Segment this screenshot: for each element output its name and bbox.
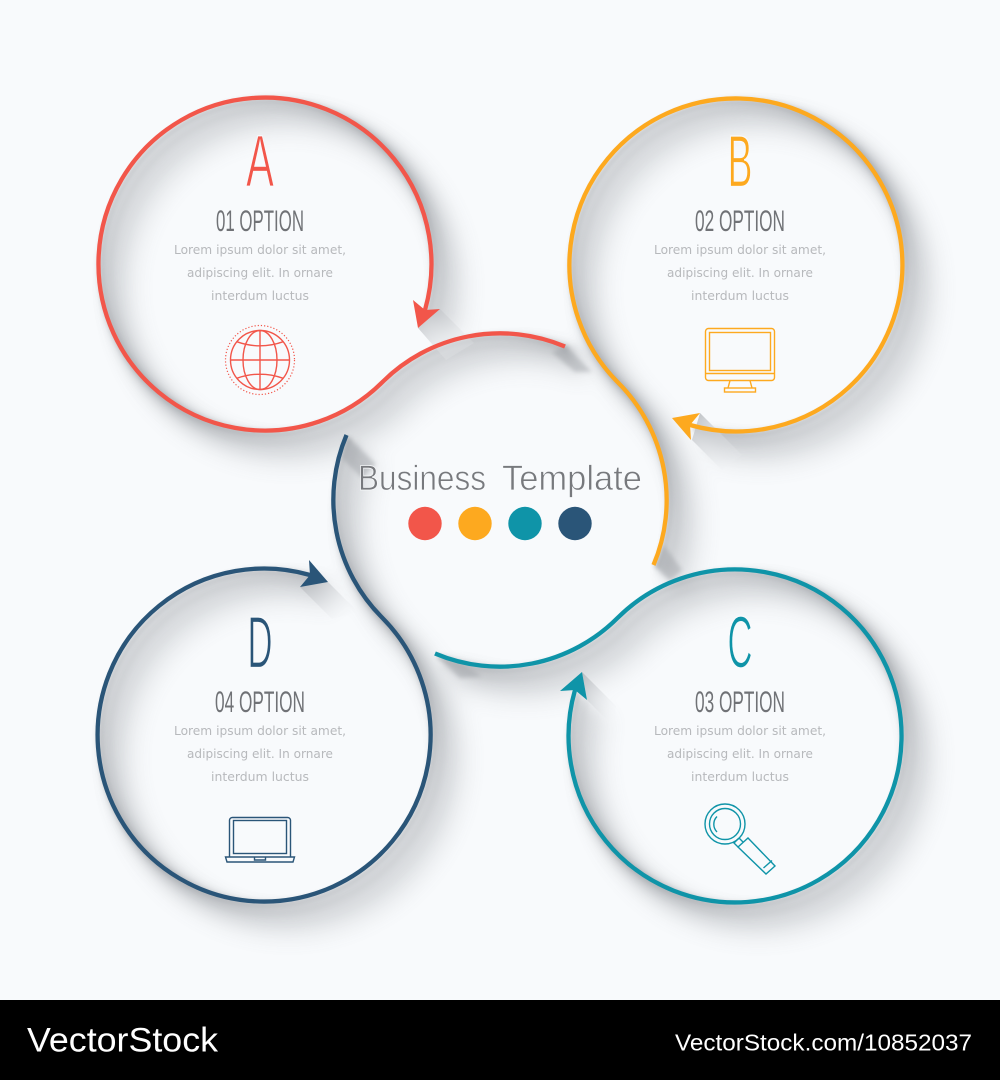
heading 03 OPTION: 03 OPTION	[695, 686, 785, 719]
body text D: adipiscing elit. In ornare	[187, 747, 333, 761]
panel D	[98, 435, 431, 902]
body text C: adipiscing elit. In ornare	[667, 747, 813, 761]
body text A	[174, 243, 346, 303]
ribbon B with arrow	[569, 98, 902, 565]
body text B	[654, 243, 826, 303]
center title: Template	[502, 459, 642, 498]
ribbon C with arrow	[435, 569, 902, 902]
footer bar	[0, 1000, 1000, 1080]
letter A: A	[246, 122, 274, 202]
icon: monitor	[706, 328, 774, 392]
icon: globe	[226, 326, 294, 394]
panel D: D	[248, 602, 272, 684]
heading 02 OPTION: 02 OPTION	[695, 205, 785, 238]
footer logo: VectorStock	[27, 1022, 219, 1060]
panel C: C	[728, 602, 752, 684]
body text D	[174, 724, 346, 784]
body text C: Lorem ipsum dolor sit amet,	[654, 724, 826, 738]
body text B: adipiscing elit. In ornare	[667, 266, 813, 280]
body text B: Lorem ipsum dolor sit amet,	[654, 243, 826, 257]
letter B: B	[728, 122, 752, 202]
long shadows from ribbon ends	[342, 346, 682, 678]
body text C: interdum luctus	[691, 770, 789, 784]
ribbon A with arrow	[98, 98, 565, 431]
long shadows from arrowheads	[300, 309, 742, 728]
center title: Business	[358, 459, 486, 498]
panel A	[98, 98, 565, 431]
body text D: interdum luctus	[211, 770, 309, 784]
center title	[358, 459, 642, 498]
body text A: interdum luctus	[211, 289, 309, 303]
body text A: Lorem ipsum dolor sit amet,	[174, 243, 346, 257]
body text A: adipiscing elit. In ornare	[187, 266, 333, 280]
icon: laptop	[226, 817, 294, 862]
body text D: Lorem ipsum dolor sit amet,	[174, 724, 346, 738]
icon: magnifier	[705, 804, 775, 874]
colour dots	[408, 507, 592, 540]
footer url: VectorStock.com/10852037	[675, 1030, 972, 1056]
body text B: interdum luctus	[691, 289, 789, 303]
heading 01 OPTION: 01 OPTION	[216, 205, 304, 238]
ribbon D with arrow	[98, 435, 431, 902]
body text C	[654, 724, 826, 784]
panel C	[435, 569, 902, 902]
panel B	[569, 98, 902, 565]
soft shadows under ribbons	[101, 101, 926, 926]
heading 04 OPTION: 04 OPTION	[215, 686, 305, 719]
